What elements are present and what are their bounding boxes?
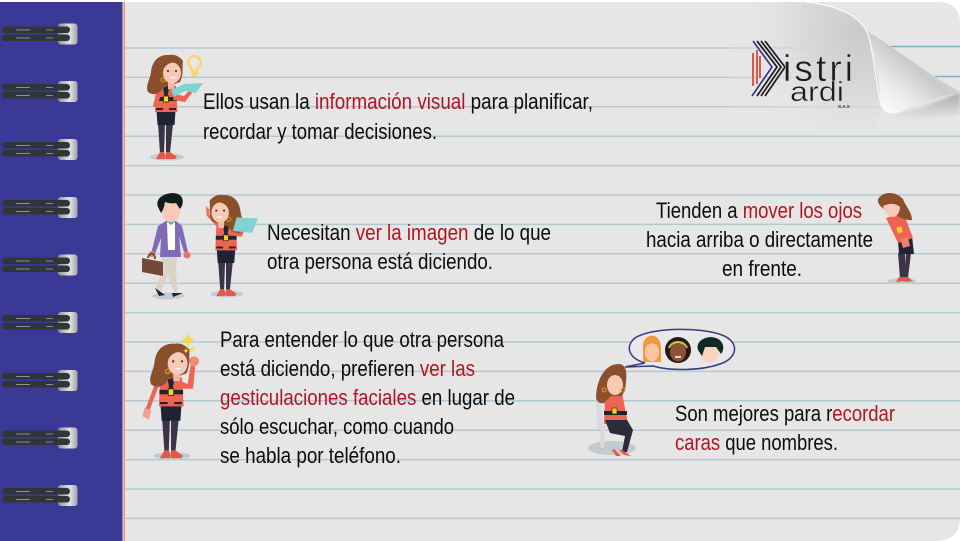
icon: dark-haired face — [698, 337, 723, 362]
text: facial gestures: gesticulaciones faciales en lugar de — [220, 385, 515, 410]
logo: Distri Ardi S.A.S.: ardi — [790, 76, 844, 107]
text: see the image — [267, 220, 551, 274]
logo: Distri Ardi S.A.S.: S.A.S — [838, 104, 850, 109]
text: facial gestures: sólo escuchar, como cuando — [220, 414, 454, 439]
text: visual information — [203, 89, 593, 144]
text: visual information: Ellos usan la información visual para planificar, — [203, 89, 593, 114]
woman — [206, 195, 258, 297]
text: facial gestures — [220, 327, 515, 468]
icon: blonde face — [643, 336, 661, 362]
text: see the image: otra persona está diciendo. — [267, 249, 493, 274]
spiral binding rings — [2, 24, 78, 506]
speech bubble with faces — [625, 329, 735, 370]
icon: dark-skinned face — [665, 337, 691, 363]
figure: woman reading with light bulb — [147, 55, 203, 160]
figure: woman leaning with eyes up — [878, 193, 916, 284]
curled page corner — [806, 2, 960, 120]
logo: Distri Ardi S.A.S.: istri — [783, 48, 853, 89]
text: facial gestures: está diciendo, prefieren ver las — [220, 356, 475, 381]
text: remembers faces: caras que nombres. — [675, 430, 838, 455]
text: remembers faces: Son mejores para recordar — [675, 401, 895, 426]
man — [142, 193, 190, 300]
logo: Distri Ardi S.A.S. — [752, 41, 853, 109]
text: eye movement — [646, 198, 873, 281]
icon: light bulb — [188, 56, 201, 76]
fold shadow — [735, 2, 882, 130]
text: facial gestures: Para entender lo que otra persona — [220, 327, 505, 352]
icon: sparkle — [181, 333, 195, 354]
text: eye movement: hacia arriba o directamente — [646, 227, 873, 252]
figure: man with briefcase and woman — [142, 193, 258, 300]
figure: seated woman — [588, 364, 636, 456]
text: see the image: Necesitan ver la imagen de lo que — [267, 220, 551, 245]
text: facial gestures: se habla por teléfono. — [220, 443, 401, 468]
figure: woman with sparkle and OK gesture — [142, 333, 199, 460]
text: remembers faces — [675, 401, 895, 455]
text: eye movement: en frente. — [722, 256, 802, 281]
ruled lines — [124, 46, 960, 518]
panel: blue notebook cover — [0, 2, 125, 541]
text: visual information: recordar y tomar decisiones. — [203, 119, 437, 144]
text: eye movement: Tienden a mover los ojos — [656, 198, 862, 223]
